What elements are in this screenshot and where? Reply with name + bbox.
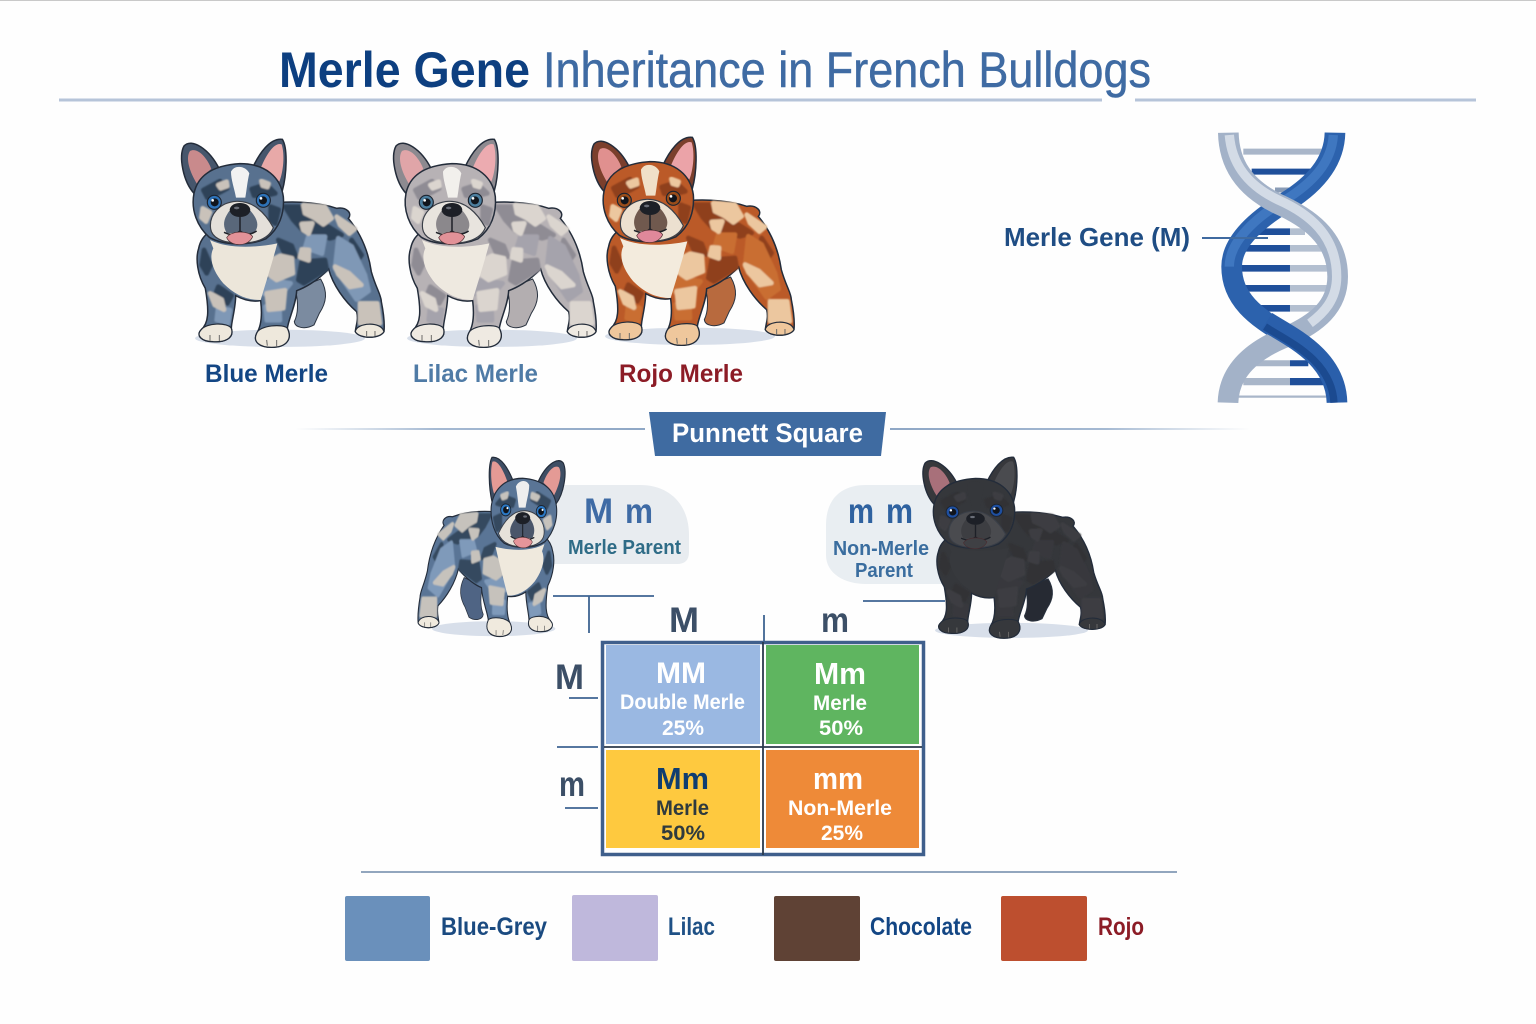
legend: blue-grey bbox=[345, 896, 547, 961]
column and row allele headers: m bbox=[821, 601, 849, 640]
cell: Mm bottom left: Merle bbox=[656, 797, 709, 820]
heading: punnett square: Punnett Square bbox=[672, 418, 863, 448]
cell: MM bbox=[606, 645, 760, 744]
legend: chocolate: Chocolate bbox=[870, 913, 972, 941]
cell: mm: 25% bbox=[821, 822, 863, 845]
title: Inheritance in French Bulldogs bbox=[543, 42, 1151, 98]
cell: MM: 25% bbox=[662, 717, 704, 740]
panel: merle parent genotype: m bbox=[625, 492, 653, 531]
panel: non-merle parent genotype: Non-Merle bbox=[833, 538, 929, 560]
cell: Mm bottom left: 50% bbox=[661, 822, 705, 845]
cell: Mm top right: Mm bbox=[814, 656, 866, 691]
legend rule bbox=[361, 871, 1177, 873]
label: blue merle: Blue Merle bbox=[205, 360, 328, 388]
cell: mm: Non-Merle bbox=[788, 797, 892, 820]
title: Merle Gene bbox=[279, 42, 530, 98]
dog: blue merle bbox=[182, 139, 384, 347]
legend: lilac bbox=[572, 895, 715, 961]
column and row allele headers: M bbox=[669, 601, 699, 640]
cell: Mm top right: Merle bbox=[813, 692, 867, 715]
legend: chocolate bbox=[774, 896, 972, 961]
column and row allele headers: m bbox=[559, 765, 585, 804]
title underline bbox=[59, 98, 1476, 102]
panel: merle parent genotype: M bbox=[584, 492, 613, 531]
punnett square grid bbox=[602, 642, 924, 855]
column and row allele headers bbox=[555, 601, 849, 804]
legend: blue-grey: Blue-Grey bbox=[441, 913, 547, 941]
cell: mm: mm bbox=[813, 761, 863, 796]
cell: MM: MM bbox=[656, 657, 706, 690]
gene pointer line bbox=[1202, 237, 1268, 239]
dog: lilac merle bbox=[394, 139, 596, 347]
label: merle gene: Merle Gene (M) bbox=[1004, 222, 1190, 252]
panel: merle parent genotype bbox=[550, 485, 689, 564]
heading: punnett square bbox=[649, 412, 886, 456]
legend: rojo bbox=[1001, 896, 1144, 961]
dog: rojo merle bbox=[592, 137, 794, 345]
cell: Mm bottom left: Mm bbox=[656, 761, 709, 796]
legend: rojo: Rojo bbox=[1098, 913, 1144, 941]
column and row allele headers: M bbox=[555, 658, 584, 697]
cell: Mm top right: 50% bbox=[819, 717, 863, 740]
dog: merle parent bbox=[418, 457, 565, 636]
label: lilac merle: Lilac Merle bbox=[413, 360, 538, 388]
panel: non-merle parent genotype: m bbox=[886, 492, 913, 531]
cell: MM: Double Merle bbox=[620, 691, 745, 714]
label: rojo merle: Rojo Merle bbox=[619, 360, 743, 388]
icon: DNA double helix bbox=[1228, 133, 1338, 403]
punnett rule right bbox=[890, 428, 1250, 430]
cell: Mm top right bbox=[766, 645, 919, 744]
connector lines bbox=[553, 596, 945, 808]
cell: mm bbox=[766, 750, 919, 848]
cell: Mm bottom left bbox=[606, 750, 760, 848]
dog: non-merle parent bbox=[923, 457, 1105, 638]
panel: non-merle parent genotype: m bbox=[848, 492, 874, 531]
punnett rule left bbox=[295, 428, 645, 430]
legend: lilac: Lilac bbox=[668, 913, 715, 941]
title bbox=[279, 42, 1151, 98]
panel: non-merle parent genotype: Parent bbox=[855, 560, 913, 582]
panel: merle parent genotype: Merle Parent bbox=[568, 537, 681, 559]
panel: non-merle parent genotype bbox=[826, 485, 960, 584]
